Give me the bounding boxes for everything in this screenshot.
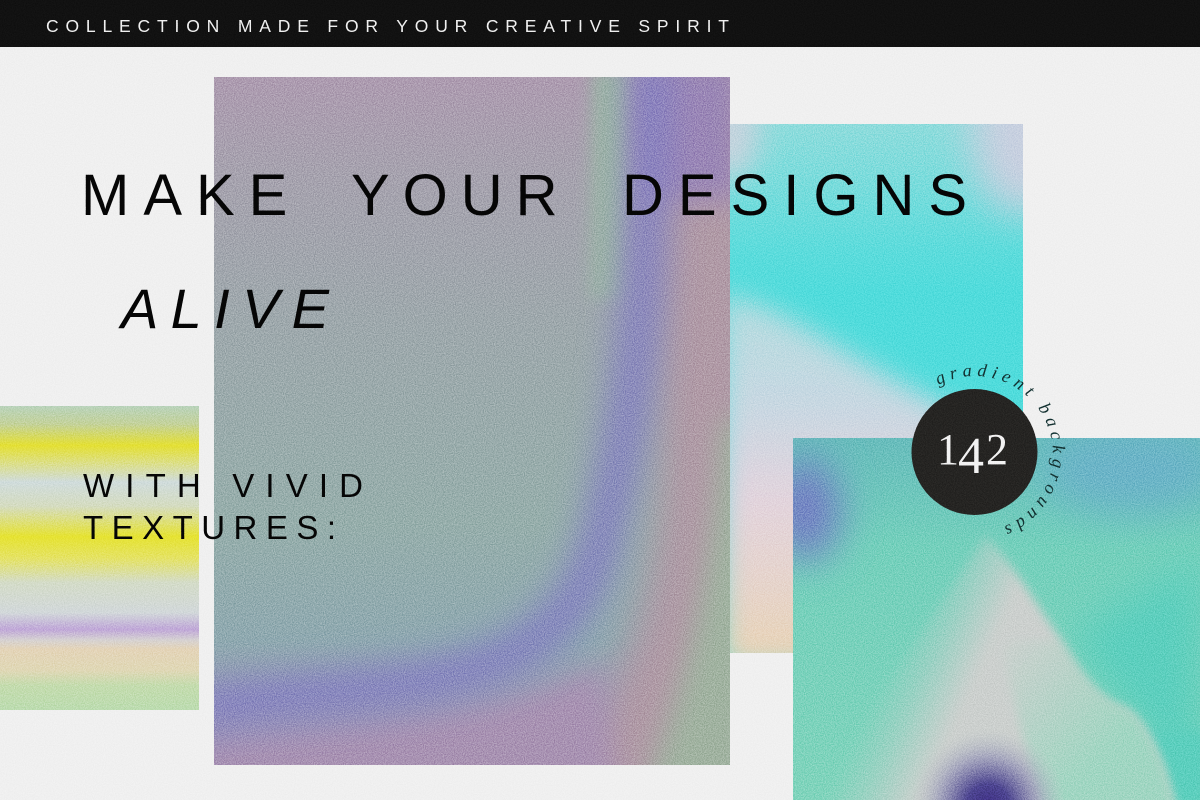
subheading: with vivid textures xyxy=(83,467,363,546)
subheading: with vivid textures: TEXTURES: xyxy=(83,509,336,546)
heading: make your designs: MAKE xyxy=(81,163,301,228)
badge number: 1 xyxy=(937,425,959,474)
panel: teal gradient swatch xyxy=(730,124,1023,653)
badge number: 4 xyxy=(958,428,984,485)
header bar xyxy=(0,0,1200,47)
panel: yellow striped gradient swatch xyxy=(0,406,199,710)
heading: make your designs: DESIGNS xyxy=(622,163,981,228)
heading: make your designs: YOUR xyxy=(351,163,571,228)
curved label: gradient backgrounds xyxy=(937,364,1066,534)
badge: 142 gradient backgrounds xyxy=(912,364,1066,534)
header tagline: COLLECTION MADE FOR YOUR CREATIVE SPIRIT xyxy=(46,16,729,36)
heading: make your designs xyxy=(81,163,981,228)
badge number: 2 xyxy=(986,425,1008,474)
subheading: with vivid textures: WITH VIVID xyxy=(83,467,363,504)
heading: alive: ALIVE xyxy=(118,277,330,340)
panel: central purple-grey gradient swatch xyxy=(214,77,730,765)
panel: green-teal gradient swatch xyxy=(770,428,1200,800)
badge circle xyxy=(912,389,1038,515)
